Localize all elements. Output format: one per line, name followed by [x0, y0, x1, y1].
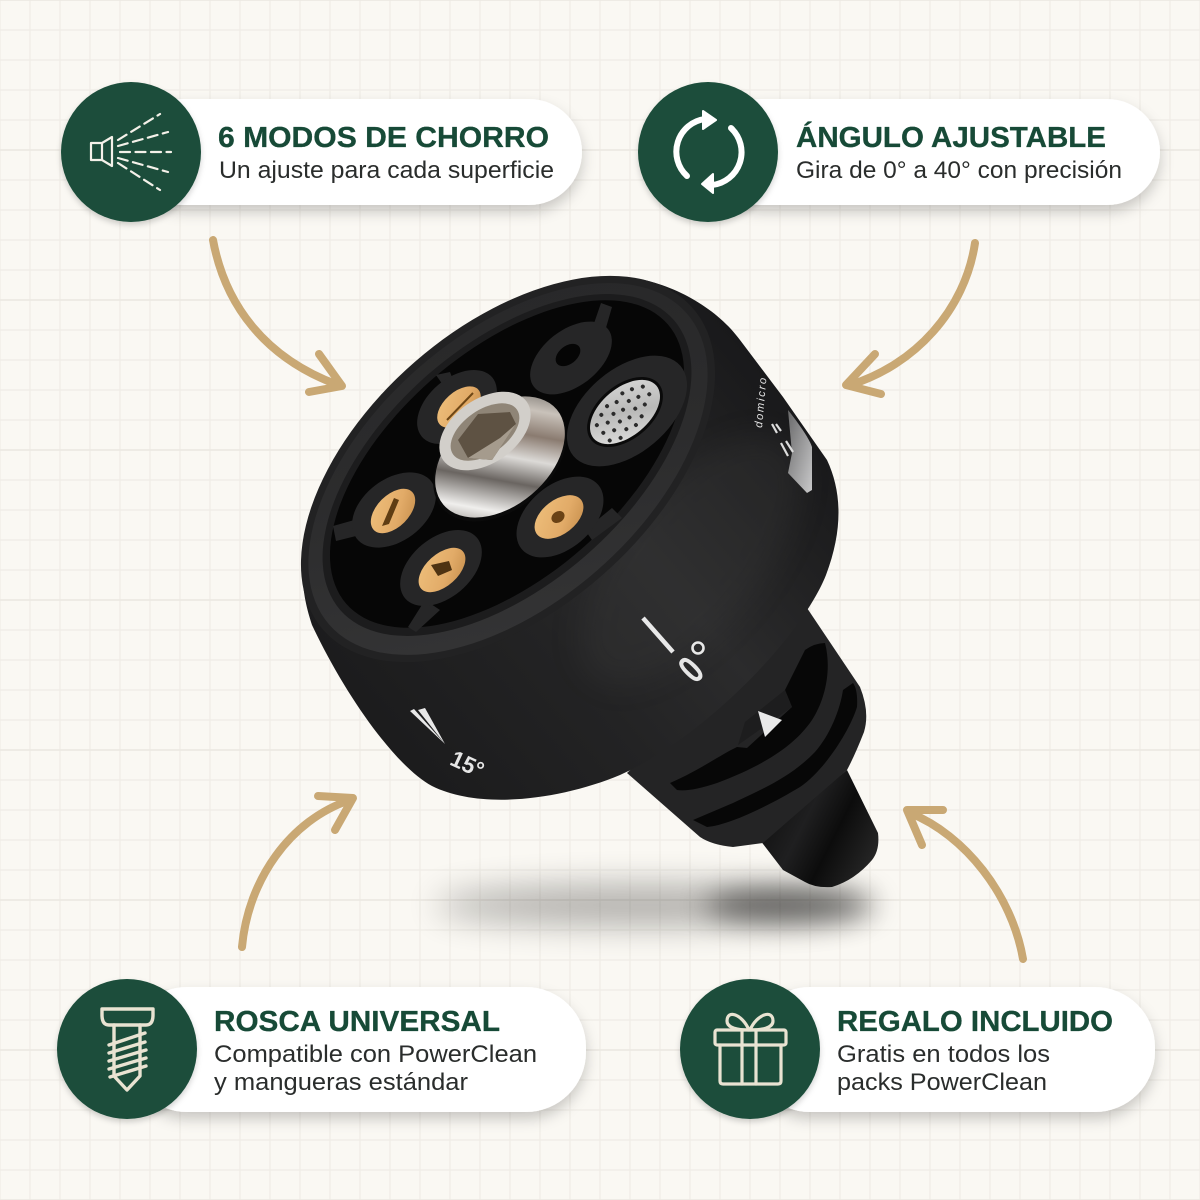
- green icon circle: [57, 979, 197, 1119]
- upper rib slot: [670, 643, 828, 790]
- callout: ángulo ajustable: [638, 82, 1160, 222]
- gasket and outlet: top: [517, 307, 625, 409]
- pill card: [130, 99, 582, 205]
- product: six-mode nozzle: [230, 201, 878, 887]
- gasket and shower mesh nozzle: [546, 334, 708, 488]
- icon: gift box: [715, 1014, 786, 1084]
- product ground shadow: [435, 885, 875, 925]
- heading: REGALO INCLUIDO: [837, 1006, 1113, 1038]
- callout: rosca universal: y mangueras estándar: [214, 1069, 468, 1096]
- brass nozzle: bottom angled: [386, 515, 496, 621]
- body scale marks: [410, 377, 812, 783]
- arrow: bottom-left: [242, 796, 353, 947]
- icon: spray: [91, 114, 171, 190]
- body scale marks: 15°: [447, 745, 488, 783]
- brass nozzle: left fan: [338, 457, 450, 563]
- nozzle tail: [760, 770, 878, 887]
- arrow: top-right: [846, 243, 975, 394]
- heading: ROSCA UNIVERSAL: [214, 1006, 500, 1038]
- neck pointer triangle: [758, 711, 782, 737]
- heading: 6 MODOS DE CHORRO: [218, 122, 549, 154]
- neck pointer plate: [738, 690, 792, 745]
- green icon circle: [61, 82, 201, 222]
- pill card: [127, 987, 586, 1112]
- central steel bolt: [409, 371, 591, 547]
- lower rib slot: [693, 683, 857, 827]
- description: Gratis en todos los: [837, 1041, 1050, 1068]
- callout: 6 modos de chorro: [61, 82, 582, 222]
- rubber gasket arms: [333, 303, 622, 632]
- pill card: [708, 99, 1160, 205]
- nozzle neck with ribs: [627, 608, 866, 847]
- callout: regalo incluido: packs PowerClean: [837, 1069, 1047, 1096]
- description: Gira de 0° a 40° con precisión: [796, 157, 1122, 184]
- arrow: top-left: [213, 240, 342, 392]
- icon: rotation arrows: [676, 111, 742, 193]
- callout: rosca universal: [57, 979, 586, 1119]
- green icon circle: [638, 82, 778, 222]
- arrow: bottom-right: [907, 810, 1023, 959]
- description: Compatible con PowerClean: [214, 1041, 537, 1068]
- callout: regalo incluido: [680, 979, 1155, 1119]
- face rim: [230, 201, 786, 737]
- brass nozzle: right round: [501, 460, 619, 574]
- description: Un ajuste para cada superficie: [219, 157, 554, 184]
- main body: [303, 277, 840, 800]
- icon: threaded screw: [102, 1009, 153, 1090]
- body scale marks: 0: [670, 649, 713, 691]
- body scale marks: domicro: [753, 377, 769, 428]
- brass nozzle: top-left slit: [403, 355, 511, 459]
- pill card: [750, 987, 1155, 1112]
- heading: ÁNGULO AJUSTABLE: [796, 120, 1106, 154]
- green icon circle: [680, 979, 820, 1119]
